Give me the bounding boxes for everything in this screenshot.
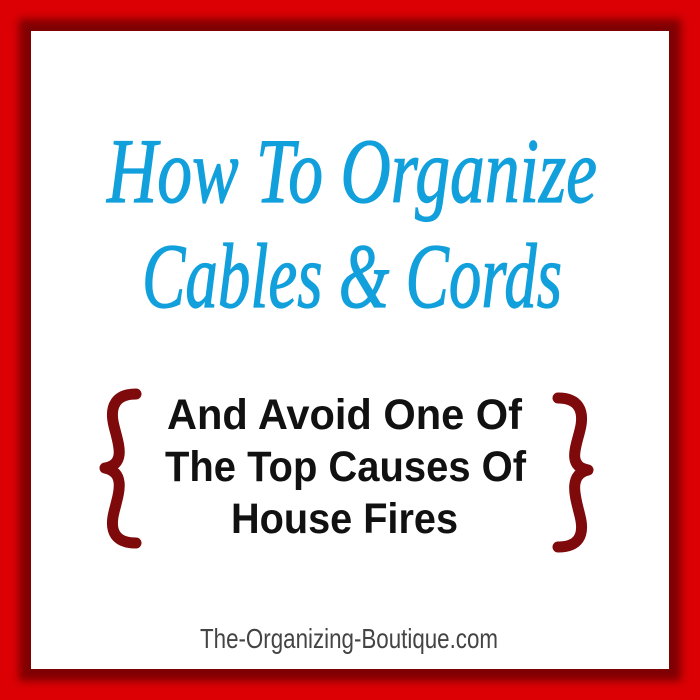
subtitle: House Fires <box>231 495 458 543</box>
icon: left brace <box>105 394 136 543</box>
title <box>106 120 597 327</box>
subtitle: And Avoid One Of <box>167 391 523 439</box>
icon: right brace <box>558 398 588 547</box>
footer website: The-Organizing-Boutique.com <box>200 623 498 654</box>
subtitle: The Top Causes Of <box>165 443 527 491</box>
subtitle <box>165 391 527 543</box>
